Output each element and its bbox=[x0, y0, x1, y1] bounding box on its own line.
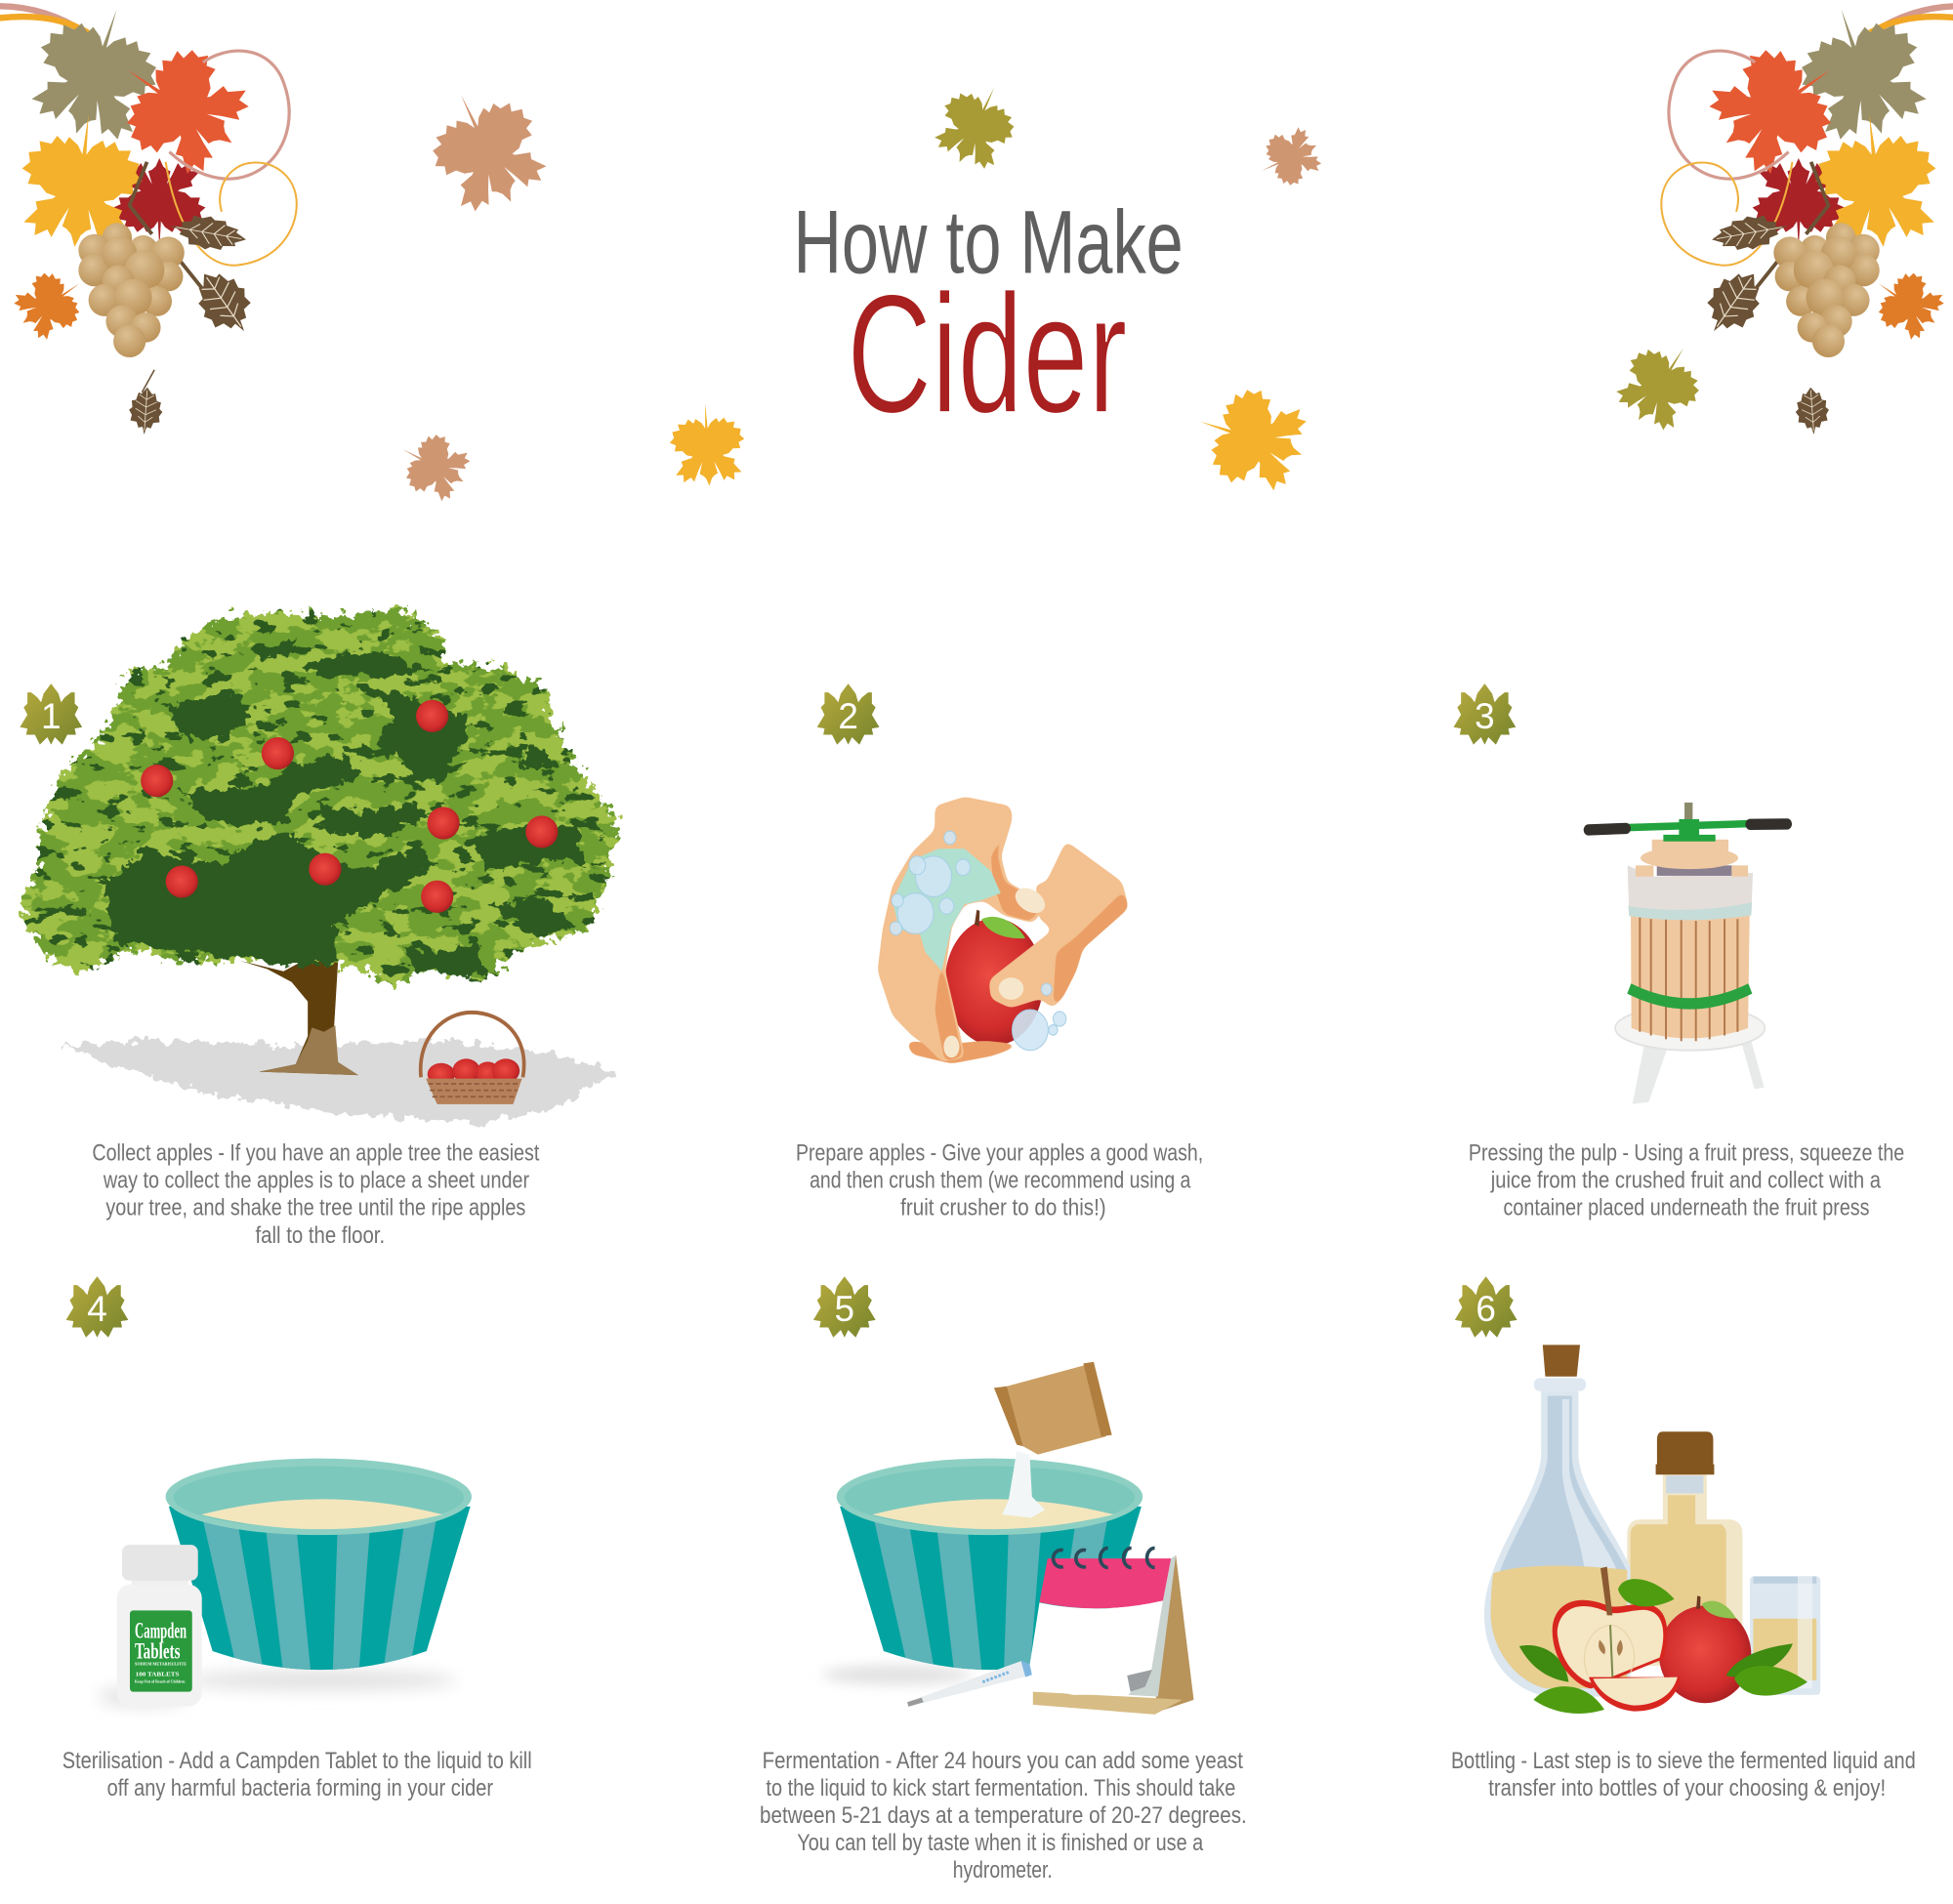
title bbox=[793, 192, 1184, 448]
step 5 text: between 5-21 days at a temperature of 20-27 degrees. bbox=[760, 1802, 1247, 1828]
halved apple bbox=[1553, 1566, 1675, 1688]
falling leaf: yellow large bbox=[1185, 375, 1316, 501]
step 4 text: Sterilisation - Add a Campden Tablet to the liquid to kill bbox=[62, 1748, 532, 1773]
large bottle liquid bbox=[1491, 1565, 1627, 1688]
step 2 number badge: 2 bbox=[838, 696, 858, 736]
step 5 number badge bbox=[813, 1276, 876, 1338]
step 1 text: fall to the floor. bbox=[255, 1222, 385, 1248]
desk calendar bbox=[1026, 1548, 1193, 1715]
step 3 illustration: fruit press bbox=[1589, 803, 1787, 1104]
left hand shading bbox=[935, 815, 1043, 1061]
cloth bbox=[1628, 865, 1753, 919]
step 3 number badge: 3 bbox=[1475, 696, 1495, 736]
white page bbox=[1026, 1600, 1163, 1695]
olive grey leaf bbox=[19, 0, 174, 152]
fermentation bowl bbox=[837, 1459, 1143, 1678]
step 1 number badge: 1 bbox=[41, 696, 62, 736]
basket wicker body bbox=[426, 1079, 522, 1104]
green handle bar bbox=[1624, 824, 1751, 828]
step 1 number badge bbox=[20, 683, 82, 745]
title line: How to Make: How to Make bbox=[793, 192, 1184, 292]
step 3 text: juice from the crushed fruit and collect with a bbox=[1490, 1168, 1882, 1193]
step 2 number badge bbox=[817, 683, 880, 745]
apple stem bbox=[1600, 1566, 1612, 1615]
step 2 text: and then crush them (we recommend using a bbox=[810, 1168, 1191, 1193]
top-right corner decoration: mirrored leaves and grapes bbox=[1661, 0, 1953, 435]
soapy water on hand bbox=[893, 849, 1001, 971]
step 5 text: You can tell by taste when it is finished or use a bbox=[797, 1830, 1204, 1855]
hub bbox=[1663, 819, 1716, 842]
apple bbox=[945, 910, 1043, 1046]
wooden slats bbox=[1631, 915, 1750, 1041]
black grips bbox=[1589, 824, 1787, 830]
step 5 illustration: bowl with yeast, calendar and thermometer bbox=[822, 1362, 1193, 1715]
press tray bbox=[1615, 1006, 1765, 1051]
step 1 illustration: apple tree bbox=[19, 607, 619, 1123]
step 4 number badge: 4 bbox=[87, 1289, 107, 1329]
spiral rings bbox=[1054, 1548, 1155, 1567]
glass bbox=[1750, 1576, 1820, 1695]
green label bbox=[130, 1610, 192, 1692]
trunk bbox=[239, 961, 358, 1075]
step 5 text: hydrometer. bbox=[953, 1857, 1053, 1883]
calendar stand bbox=[1155, 1555, 1193, 1713]
orange red leaf bbox=[94, 22, 265, 190]
step 4 number badge bbox=[66, 1276, 128, 1338]
green band bbox=[1629, 988, 1750, 1004]
basket handle bbox=[421, 1013, 524, 1077]
calendar base bbox=[1033, 1692, 1183, 1715]
stem of falling brown leaf bbox=[142, 370, 154, 393]
yellow swirl ribbon bbox=[166, 162, 297, 266]
bowl with liquid bbox=[166, 1459, 472, 1678]
brown vine stems bbox=[130, 162, 205, 293]
brown leaf upper bbox=[167, 210, 249, 256]
label text: Keep Out of Reach of Children bbox=[135, 1679, 186, 1684]
page curl bbox=[1127, 1670, 1152, 1692]
thermometer bbox=[907, 1661, 1032, 1707]
large bottle bbox=[1484, 1345, 1631, 1697]
label text bbox=[135, 1619, 187, 1684]
label text: Campden bbox=[135, 1619, 187, 1644]
canopy light foliage bbox=[19, 607, 619, 984]
step 6 text: transfer into bottles of your choosing & enjoy! bbox=[1488, 1775, 1886, 1801]
step 5 text: to the liquid to kick start fermentation. This should take bbox=[766, 1775, 1235, 1801]
press blocks bbox=[1636, 840, 1748, 877]
falling leaf: tan small bbox=[389, 422, 478, 509]
label text: SODIUM METABISULFITE bbox=[135, 1661, 187, 1666]
step 4 illustration: bowl and tablets bbox=[98, 1459, 472, 1707]
whole apple bbox=[1659, 1595, 1751, 1703]
step 2 illustration: washing an apple in hands bbox=[878, 797, 1129, 1063]
finger nails bbox=[943, 883, 1049, 1057]
small bottle cap bbox=[1656, 1431, 1714, 1474]
step 2 text: Prepare apples - Give your apples a good wash, bbox=[796, 1140, 1203, 1166]
ribbons at the corner bbox=[0, 6, 87, 32]
top-left corner decoration: leaves and grapes bbox=[0, 0, 297, 435]
step 1 text: Collect apples - If you have an apple tree the easiest bbox=[92, 1140, 540, 1166]
step 2 text bbox=[796, 1140, 1203, 1221]
step 5 number badge: 5 bbox=[835, 1289, 854, 1329]
bottle body bbox=[117, 1585, 202, 1707]
step 1 text: way to collect the apples is to place a sheet under bbox=[103, 1168, 529, 1193]
brown leaf lower bbox=[184, 260, 265, 346]
press interior bbox=[1657, 865, 1731, 876]
bottle cap bbox=[122, 1545, 198, 1581]
right hand shading bbox=[1053, 891, 1129, 1008]
yellow leaf bbox=[15, 108, 148, 253]
apple leaf bbox=[1618, 1579, 1675, 1606]
label text: Tablets bbox=[135, 1639, 180, 1665]
right hand bbox=[989, 842, 1129, 1008]
step 1 text bbox=[92, 1140, 540, 1248]
falling leaf: olive centre bbox=[926, 72, 1028, 178]
orange leaf bbox=[5, 258, 97, 349]
falling leaf: yellow small bbox=[668, 401, 747, 487]
yeast pouring bbox=[1002, 1451, 1045, 1518]
trunk base bbox=[259, 1025, 358, 1075]
step 3 text: container placed underneath the fruit press bbox=[1504, 1195, 1870, 1221]
falling leaf: olive right bbox=[1605, 327, 1717, 440]
small falling brown leaf bbox=[127, 386, 164, 435]
step 1 text: your tree, and shake the tree until the ripe apples bbox=[105, 1195, 525, 1221]
pink swirl ribbon bbox=[169, 51, 289, 179]
step 4 text: off any harmful bacteria forming in your cider bbox=[107, 1775, 493, 1801]
grape bunch bbox=[78, 223, 185, 357]
title line: Cider: Cider bbox=[847, 259, 1127, 448]
step 4 text bbox=[62, 1748, 532, 1801]
canopy base bbox=[19, 607, 619, 984]
palm under the apple bbox=[905, 1041, 1023, 1063]
step 6 text bbox=[1451, 1748, 1916, 1801]
dark red leaf bbox=[113, 158, 205, 249]
ground shadow bbox=[65, 1041, 615, 1123]
left hand bbox=[878, 797, 1047, 1061]
label text: 100 TABLETS bbox=[136, 1672, 180, 1678]
pink header bbox=[1039, 1558, 1171, 1608]
back pages bbox=[1129, 1555, 1176, 1697]
step 6 number badge: 6 bbox=[1475, 1289, 1496, 1329]
falling leaf: tan right bbox=[1250, 120, 1328, 195]
step 6 illustration: bottles and apples bbox=[1484, 1345, 1820, 1714]
bottle neck bbox=[132, 1576, 188, 1590]
canopy dark foliage bbox=[19, 607, 619, 984]
step 5 text bbox=[760, 1748, 1247, 1883]
step 6 number badge bbox=[1455, 1276, 1517, 1338]
step 3 number badge bbox=[1454, 683, 1516, 745]
bottle lip bbox=[1534, 1378, 1586, 1391]
basket of apples bbox=[421, 1013, 524, 1104]
front leaves bbox=[1533, 1666, 1808, 1714]
tablet bottle bbox=[98, 1545, 202, 1707]
cork bbox=[1543, 1345, 1580, 1377]
canopy shaded areas bbox=[107, 637, 585, 974]
apple slice bbox=[1589, 1677, 1681, 1712]
basket apples bbox=[428, 1058, 519, 1086]
step 2 text: fruit crusher to do this!) bbox=[900, 1195, 1106, 1221]
falling leaf: tan large bbox=[412, 72, 560, 225]
bowl shadow bbox=[822, 1665, 972, 1685]
step 5 text: Fermentation - After 24 hours you can add some yeast bbox=[763, 1748, 1243, 1773]
step 3 text bbox=[1469, 1140, 1904, 1221]
screw bbox=[1684, 803, 1692, 821]
small bottle bbox=[1627, 1431, 1742, 1666]
soap bubbles bbox=[890, 831, 1066, 1051]
press legs bbox=[1633, 1041, 1765, 1104]
yeast packet bbox=[994, 1362, 1112, 1455]
apples on tree bbox=[141, 700, 558, 913]
back leaves bbox=[1519, 1643, 1793, 1682]
bowl shadow bbox=[185, 1670, 457, 1691]
